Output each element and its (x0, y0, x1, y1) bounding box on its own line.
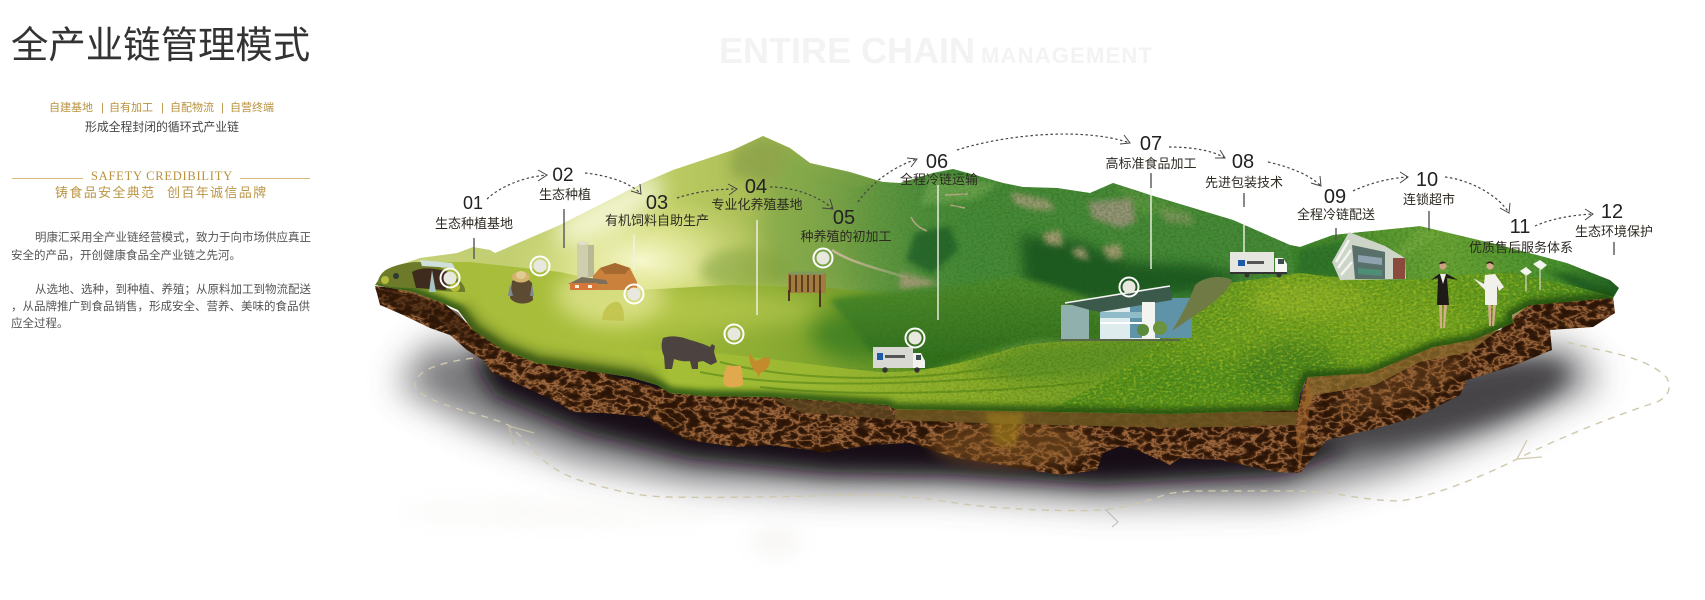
foreground grass texture (1051, 273, 1614, 414)
step labels: 全程冷链运输 (900, 172, 978, 187)
processing building (1060, 286, 1192, 341)
step numbers: 09 (1324, 186, 1346, 208)
step numbers: 02 (552, 165, 574, 186)
gold subheading (55, 185, 267, 200)
step labels (435, 156, 1653, 255)
step labels: 优质售后服务体系 (1469, 240, 1573, 255)
grass texture (862, 170, 1619, 409)
midground field (375, 262, 1000, 420)
pinwheels (1520, 260, 1547, 291)
step labels: 生态环境保护 (1575, 224, 1653, 239)
step numbers: 11 (1510, 216, 1530, 238)
big mountain (370, 130, 1370, 430)
step numbers: 10 (1416, 169, 1438, 191)
road on big mountain (832, 250, 905, 277)
background english title (719, 30, 1153, 71)
step numbers: 08 (1232, 151, 1254, 173)
leader lines (474, 173, 1614, 320)
step numbers: 03 (646, 192, 668, 214)
dashed loop path around island (415, 341, 1669, 527)
step labels: 高标准食品加工 (1105, 156, 1197, 171)
step numbers: 06 (926, 151, 948, 173)
tagline: four self-owned links: 自配物流 (170, 102, 214, 114)
haystack (602, 302, 624, 321)
tagline: four self-owned links: 自营终端 (230, 102, 274, 114)
step numbers: 07 (1140, 133, 1162, 155)
chickens (723, 352, 770, 387)
tagline: four self-owned links: 自有加工 (109, 102, 153, 114)
step labels: 全程冷链配送 (1297, 207, 1375, 222)
foreground striped field (662, 341, 1306, 414)
background english title: ENTIRE CHAIN (719, 30, 975, 71)
step labels: 种养殖的初加工 (800, 229, 892, 244)
soil cross-section (375, 286, 1615, 475)
shaded grass edge (375, 285, 1613, 414)
second mountain range (848, 169, 1290, 299)
step numbers: 05 (833, 207, 855, 229)
island grass surface with mountains (370, 130, 1640, 430)
midground dark green hill (830, 277, 1120, 372)
step numbers (463, 133, 1623, 238)
step labels: 有机饲料自助生产 (605, 213, 709, 228)
tagline: four self-owned links: | (221, 102, 224, 114)
supermarket building (1332, 232, 1406, 280)
tagline: four self-owned links (49, 102, 274, 114)
ground shadow (398, 343, 1600, 557)
pig (662, 336, 717, 369)
body paragraph 2: 从选地、选种，到种植、养殖；从原料加工到物流配送 (35, 284, 311, 296)
body paragraph 1: 安全的产品，开创健康食品全产业链之先河。 (11, 250, 241, 262)
gold subheading: 创百年诚信品牌 (167, 185, 267, 200)
step numbers: 01 (463, 193, 483, 213)
tagline: closed loop chain: 形成全程封闭的循环式产业链 (85, 120, 239, 134)
background english title: MANAGEMENT (981, 43, 1153, 68)
body paragraph 1 (11, 231, 311, 262)
body paragraph 2: ，从品牌推广到食品销售，形成安全、营养、美味的食品供 (11, 301, 310, 313)
right back hill (1290, 226, 1625, 300)
staff member in black dress (1431, 261, 1458, 328)
rock outcrop (1172, 277, 1232, 331)
farmer (508, 271, 534, 304)
foreground right hill (1040, 273, 1625, 420)
title: 全产业链管理模式 (11, 24, 310, 66)
step labels: 先进包装技术 (1205, 175, 1283, 190)
waterfall rock at left tip (378, 260, 465, 292)
tagline: four self-owned links: 自建基地 (49, 102, 93, 114)
delivery truck 2 (1230, 252, 1287, 278)
body paragraph 1: 明康汇采用全产业链经营模式，致力于向市场供应真正 (35, 232, 311, 244)
step labels: 生态种植 (539, 187, 591, 202)
step labels: 生态种植基地 (435, 216, 513, 231)
gold subheading: 铸食品安全典范 (55, 185, 155, 200)
step markers (440, 248, 1138, 348)
step numbers: 12 (1601, 201, 1623, 223)
step labels: 连锁超市 (1403, 192, 1455, 207)
tagline: four self-owned links: | (161, 102, 164, 114)
staff member in white suit (1473, 261, 1504, 326)
dashed sequence arrows (487, 134, 1593, 226)
body paragraph 2 (11, 283, 311, 330)
body paragraph 2: 应全过程。 (11, 318, 68, 330)
step numbers: 04 (745, 176, 767, 198)
delivery truck 1 (873, 347, 925, 373)
drying rack (788, 273, 826, 307)
silos and barn (568, 241, 637, 290)
step labels: 专业化养殖基地 (711, 197, 803, 212)
tagline: four self-owned links: | (101, 102, 104, 114)
safety credibility heading with rules: SAFETY CREDIBILITY (91, 169, 233, 183)
